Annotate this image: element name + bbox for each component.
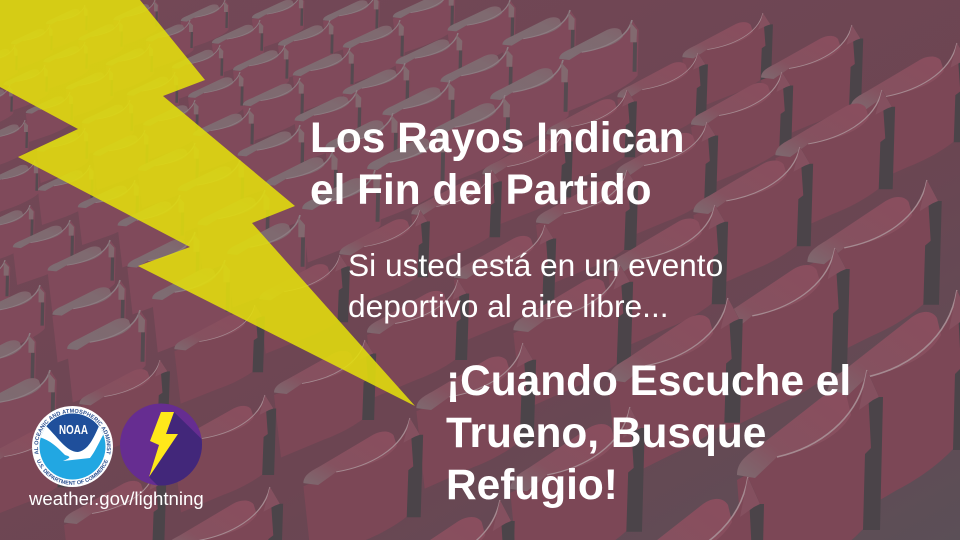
website link text: weather.gov/lightning xyxy=(29,488,204,509)
title: Los Rayos Indican xyxy=(310,114,685,161)
icon: NOAA logo xyxy=(32,406,113,487)
call to action text: ¡Cuando Escuche el xyxy=(446,357,851,404)
icon: NOAA logo: NOAA xyxy=(59,423,88,437)
icon: NOAA logo: NATIONAL OCEANIC AND ATMOSPHERIC ADMINISTRATION xyxy=(34,408,111,455)
title: el Fin del Partido xyxy=(310,166,652,213)
call to action text: Trueno, Busque xyxy=(446,409,766,456)
title xyxy=(310,114,685,213)
icon: NOAA logo: U.S. DEPARTMENT OF COMMERCE xyxy=(37,459,108,485)
call to action text: Refugio! xyxy=(446,461,618,508)
subtitle text xyxy=(348,247,723,324)
call to action text xyxy=(446,357,851,508)
icon: purple lightning badge xyxy=(120,404,202,486)
subtitle text: deportivo al aire libre... xyxy=(348,288,669,324)
subtitle text: Si usted está en un evento xyxy=(348,247,723,283)
